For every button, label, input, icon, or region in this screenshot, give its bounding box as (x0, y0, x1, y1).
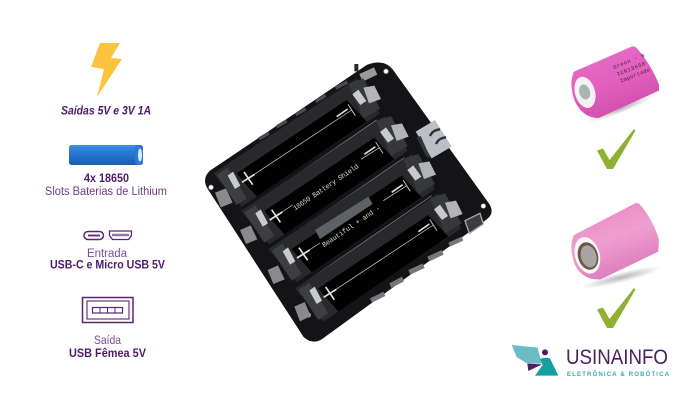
icon: lightning bolt (91, 43, 122, 97)
text: battery slots: 4x 18650 (84, 173, 129, 185)
header pads bottom (370, 237, 463, 303)
board silkscreen text 2: Beautiful + and - (321, 205, 382, 250)
battery label text: Importado (620, 67, 651, 85)
USB-A connector (416, 120, 452, 158)
text: output: Saída (94, 335, 122, 347)
battery label text (613, 53, 651, 85)
battery holder 3 (268, 154, 436, 282)
check mark 1 (597, 129, 636, 169)
logo icon (512, 345, 558, 376)
side connector pads (215, 188, 311, 321)
header pads top (258, 81, 348, 140)
circuit board (205, 62, 492, 342)
magenta battery (571, 46, 659, 126)
battery shield board (205, 62, 492, 342)
text: battery slots: Slots Baterias de Lithium (45, 186, 167, 198)
micro USB top connector (359, 67, 377, 82)
board silkscreen text 1: 18650 Battery Shield (292, 163, 361, 213)
icon: USB female port (82, 298, 133, 322)
battery label text: ICR18650 (616, 61, 646, 78)
battery holder 2 (241, 116, 409, 244)
battery label text: Green - B (613, 53, 646, 71)
USB-C corner connector (465, 213, 483, 233)
pink battery (570, 203, 663, 293)
battery holder 4 (295, 193, 463, 322)
icon: blue battery (69, 145, 143, 165)
text: output: USB Fêmea 5V (69, 348, 146, 360)
text: input: USB-C e Micro USB 5V (50, 260, 165, 272)
text: input (50, 248, 165, 272)
text: battery slots (45, 173, 167, 198)
logo wordmark: USINAINFO (566, 346, 668, 369)
icon: USB-C and micro USB ports (84, 231, 132, 240)
logo: Usinainfo (512, 345, 670, 378)
mounting holes (209, 69, 486, 317)
battery holder 1 (213, 78, 381, 207)
text: output (69, 335, 146, 360)
check mark 2 (597, 288, 636, 328)
logo tagline: ELETRÔNICA & ROBÓTICA (567, 370, 670, 378)
power switch (354, 64, 358, 71)
text: input: Entrada (87, 248, 128, 260)
heading: outputs: Saídas 5V e 3V 1A (61, 104, 151, 118)
